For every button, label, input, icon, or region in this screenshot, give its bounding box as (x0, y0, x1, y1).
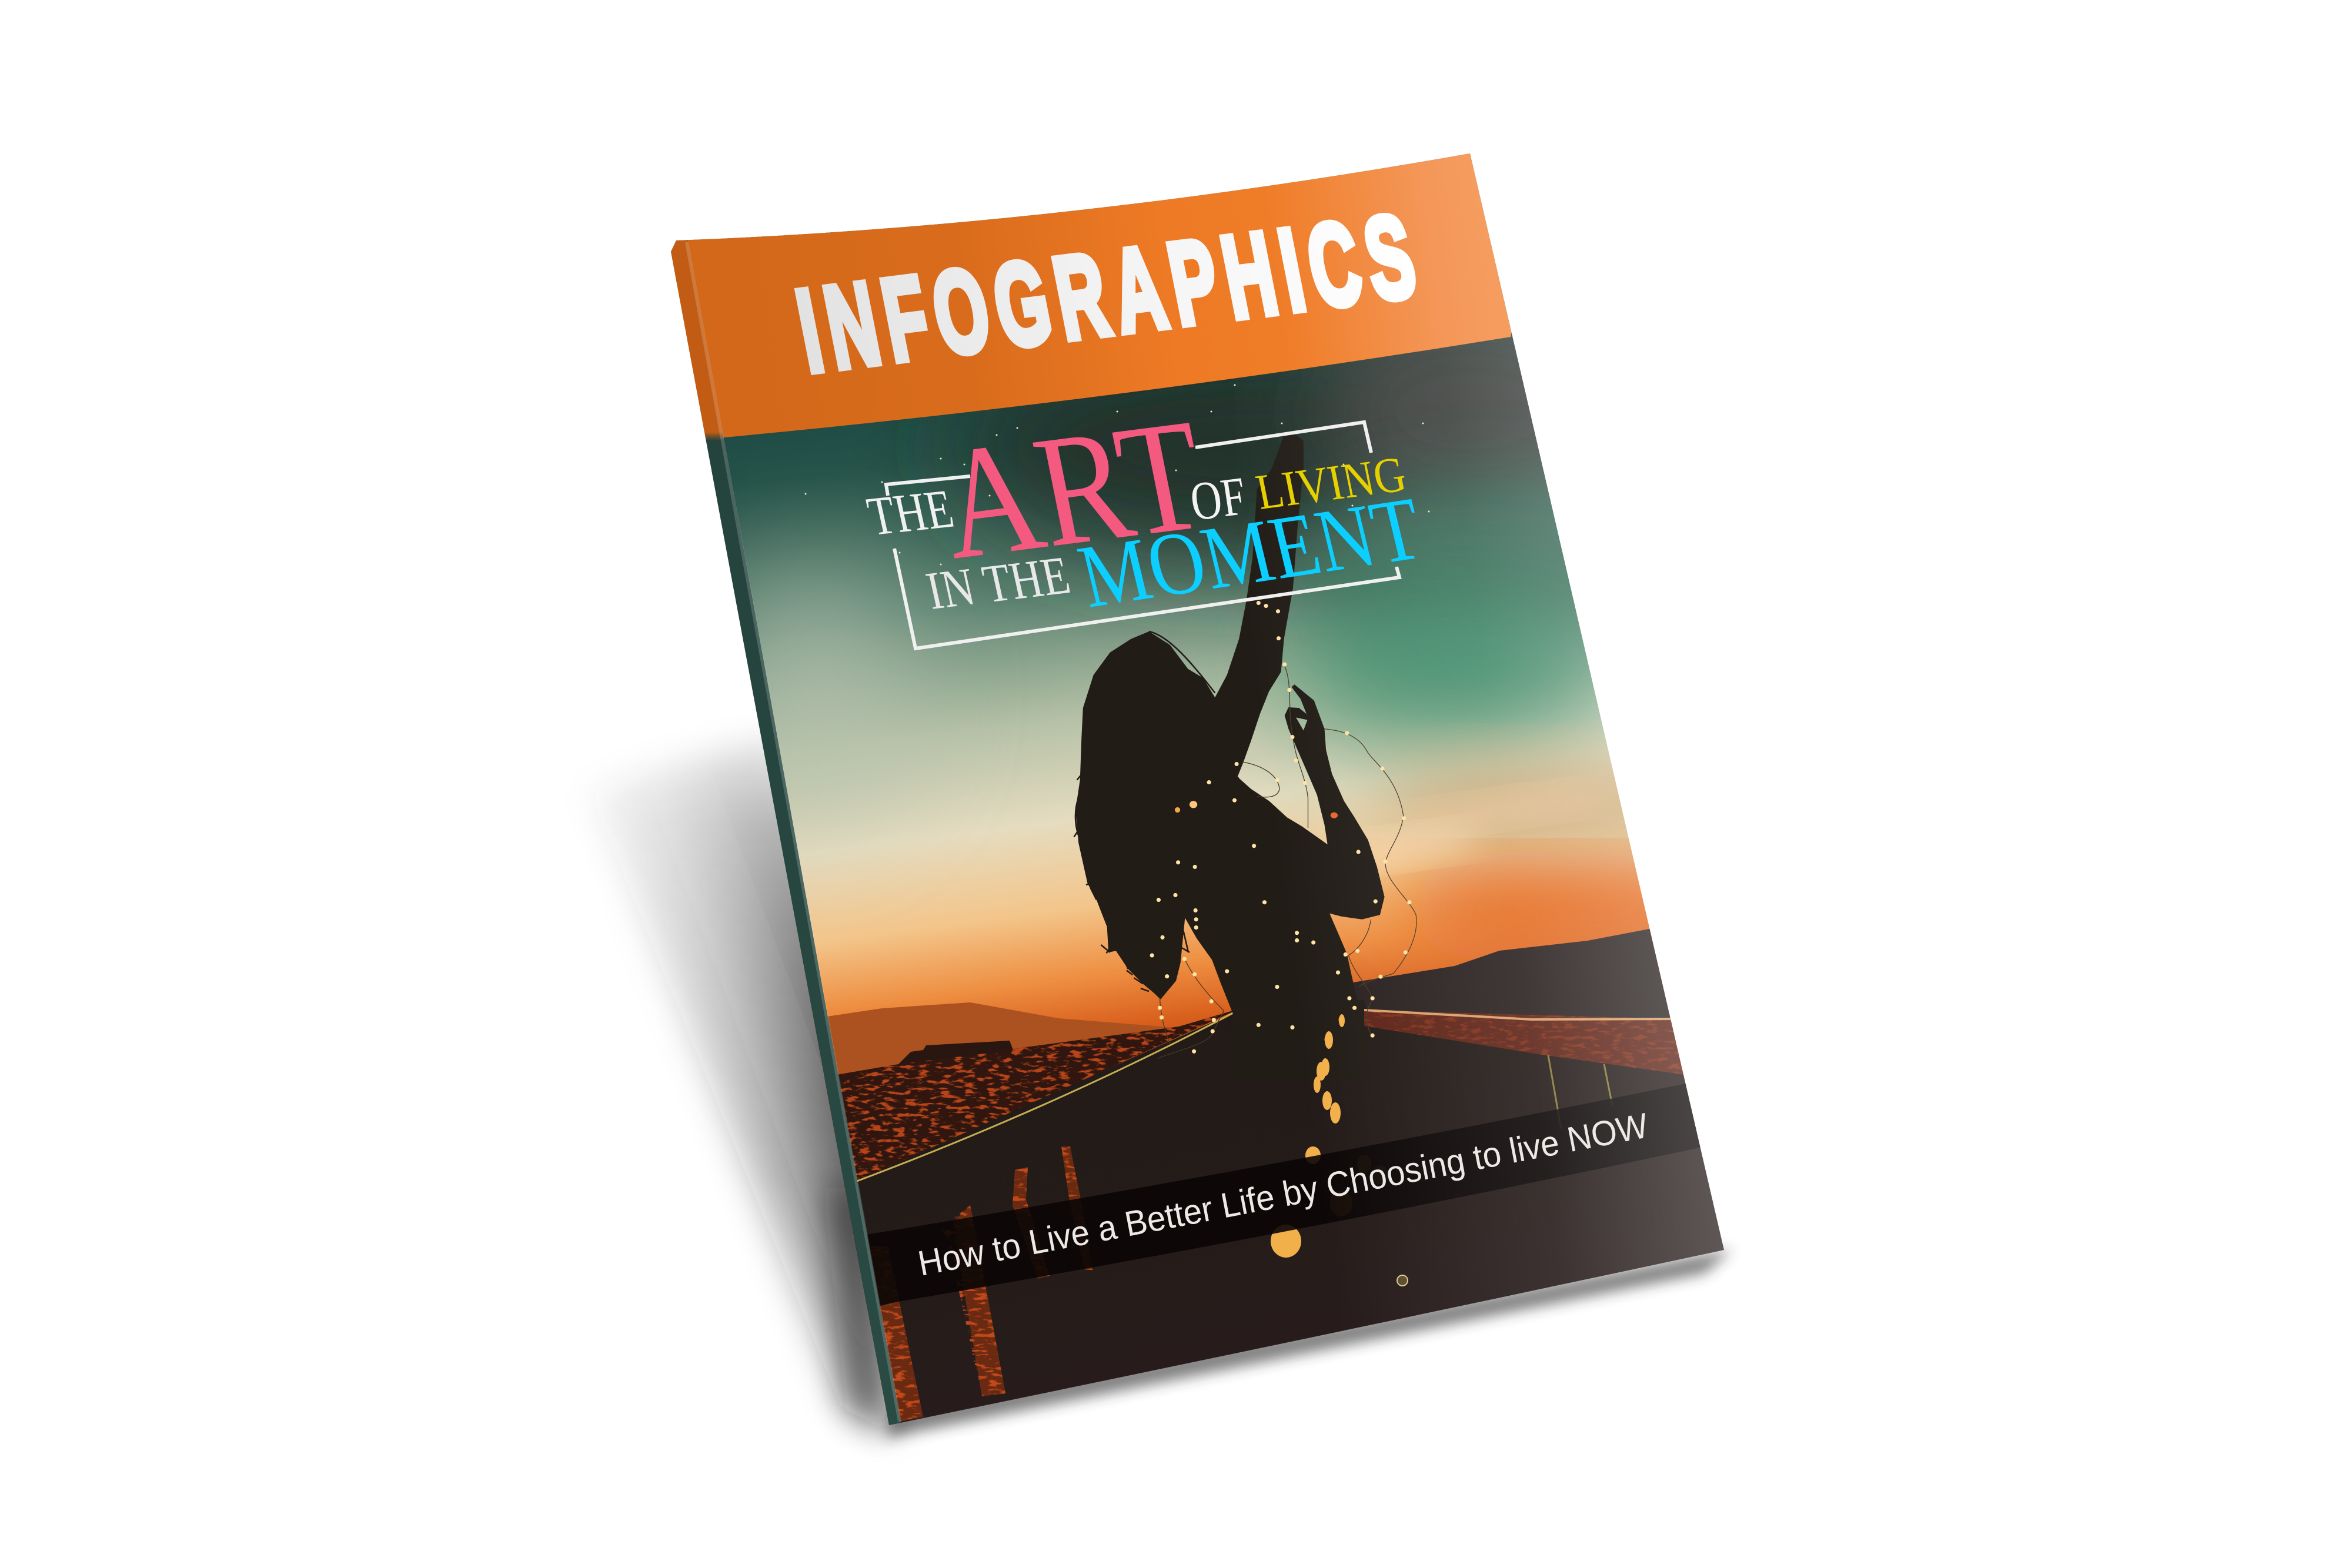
bokeh lights (1271, 1014, 1408, 1286)
subtitle: How to Live a Better Life by Choosing to live NOW (915, 1105, 1651, 1283)
title block (862, 385, 1431, 648)
word: ART: ART (925, 385, 1219, 593)
distant hills left (823, 1002, 1235, 1082)
fairy lights (1152, 603, 1409, 1051)
fence (1364, 1010, 1693, 1129)
subtitle bar (847, 1073, 1740, 1311)
cover gloss highlight (1235, 323, 1764, 1470)
larger warm lights (1175, 801, 1344, 1044)
title frame (886, 422, 1399, 648)
magazine cover (671, 153, 1724, 1425)
word: THE: THE (862, 479, 959, 547)
magazine mockup scene (599, 153, 1735, 1450)
word: OF: OF (1187, 466, 1250, 533)
word: MOMENT: MOMENT (1070, 479, 1431, 627)
hair strands (1074, 631, 1248, 999)
distant mountain right (1353, 929, 1675, 1035)
spine (671, 240, 901, 1425)
pier rail wire (854, 1013, 1233, 1182)
fairy light wires (1158, 664, 1416, 1058)
water reflections on pier (870, 1146, 1093, 1423)
pier ground (835, 999, 1740, 1458)
cover photo sky (647, 147, 1764, 1117)
orange header band (647, 118, 1558, 447)
sea (823, 1008, 1241, 1193)
heading: INFOGRAPHICS: INFOGRAPHICS (788, 190, 1425, 396)
woman silhouette (1074, 433, 1416, 1080)
word: LIVING: LIVING (1251, 446, 1411, 520)
small stars (806, 385, 1429, 564)
words: IN THE: IN THE (921, 545, 1075, 621)
cast shadow (588, 723, 1732, 1437)
